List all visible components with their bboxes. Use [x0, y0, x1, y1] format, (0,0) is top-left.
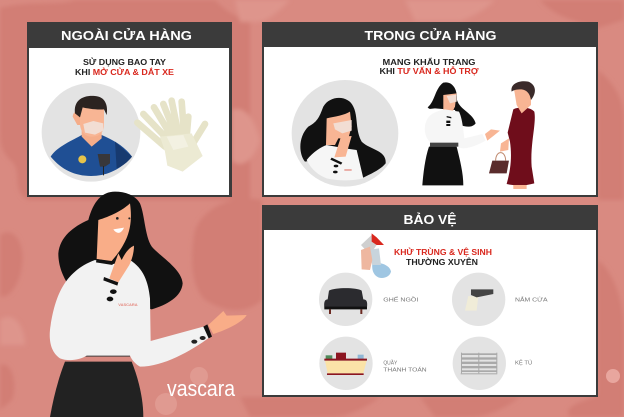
- icon: customer in red dress: [489, 81, 535, 189]
- item: door handle: [452, 273, 548, 326]
- extended hand: [208, 311, 247, 334]
- neck and face: [97, 203, 131, 261]
- panel: outside the store: [27, 22, 232, 197]
- item: shelves: [453, 337, 532, 390]
- icon: staff member: [422, 82, 500, 185]
- illustration: presenter in uniform: [50, 192, 247, 417]
- panel: inside the store: [262, 22, 598, 197]
- instruction text: disinfect: [394, 248, 492, 267]
- instruction text: gloves: SỬ DỤNG BAO TAY: [83, 58, 167, 67]
- item: checkout counter: THANH TOÁN: [383, 366, 427, 373]
- instruction text: gloves: [75, 58, 175, 77]
- item: door handle: NẮM CỬA: [515, 295, 548, 303]
- logo: vascara: vascara: [167, 376, 236, 401]
- instruction text: disinfect: KHỬ TRÙNG & VỆ SINH: [394, 248, 492, 257]
- item: checkout counter: [319, 337, 427, 390]
- icon: spray bottle: [361, 233, 391, 278]
- instruction text: masks: [380, 58, 479, 76]
- item: seating: [319, 273, 418, 326]
- instruction text: gloves: KHI MỞ CỬA & DẮT XE: [75, 68, 175, 77]
- heading: outside the store: NGOÀI CỬA HÀNG: [61, 28, 192, 43]
- skirt: [50, 362, 143, 417]
- instruction text: disinfect: THƯỜNG XUYÊN: [406, 258, 478, 267]
- item: seating: GHẾ NGỒI: [383, 296, 418, 303]
- hair: [58, 192, 183, 309]
- instruction text: masks: MANG KHẨU TRANG: [382, 58, 476, 67]
- panel: protection: [262, 205, 598, 397]
- heading: inside the store: TRONG CỬA HÀNG: [364, 28, 496, 43]
- item: checkout counter: QUẦY: [383, 360, 398, 367]
- instruction text: masks: KHI TƯ VẤN & HỖ TRỢ: [380, 66, 479, 76]
- logo on blouse: VASCARA: [118, 303, 138, 307]
- raised hand: [109, 246, 134, 282]
- belt: [80, 347, 130, 357]
- item: shelves: KỆ TỦ: [515, 359, 532, 367]
- icon: latex gloves: [137, 101, 205, 172]
- icon: masked security guard: [42, 83, 140, 182]
- heading: protection: BẢO VỆ: [404, 212, 457, 227]
- blouse: [50, 260, 211, 367]
- icon: masked staff portrait: [292, 80, 398, 187]
